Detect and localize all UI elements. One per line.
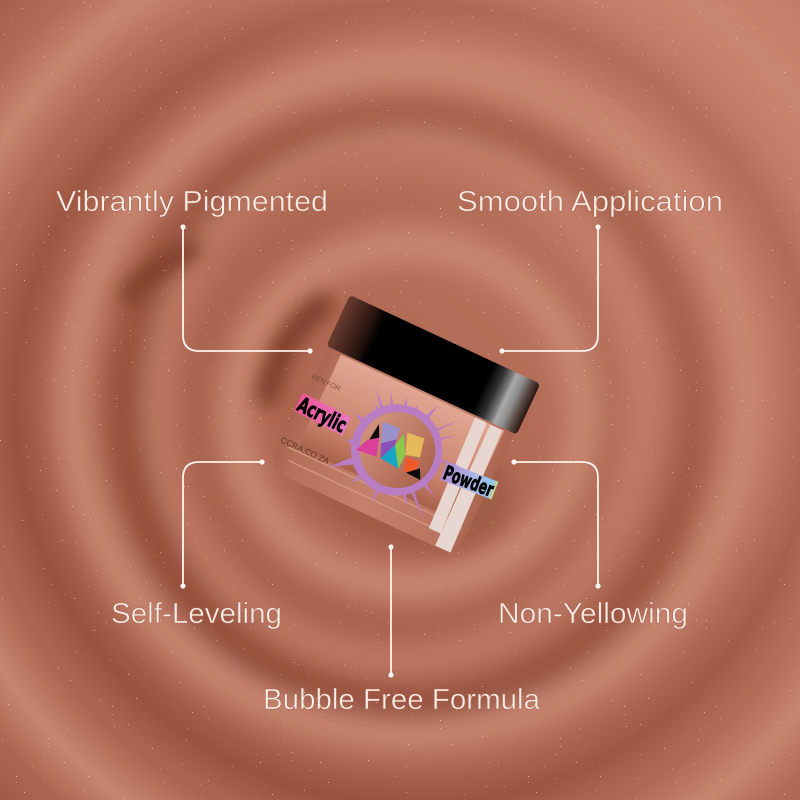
black lid	[326, 295, 540, 435]
callout: Bubble Free Formula: Bubble Free Formula	[263, 684, 541, 716]
product jar	[262, 295, 540, 587]
callout: Self-Leveling	[111, 459, 282, 630]
logo: colourful geometric shapes	[356, 422, 424, 480]
light rings	[72, 65, 748, 735]
callout: Non-Yellowing: Non-Yellowing	[498, 598, 688, 630]
small jar upper text: BEN FOR	[310, 373, 341, 393]
glass body	[268, 342, 516, 556]
small jar website text: CCRA.CO.ZA	[279, 435, 331, 466]
callout: Bubble Free Formula	[263, 544, 541, 716]
white label stripes	[419, 417, 507, 553]
powder fill	[298, 355, 504, 523]
callout: Self-Leveling: Self-Leveling	[111, 598, 282, 630]
Acrylic label band: Acrylic	[293, 393, 351, 438]
jar shadow	[262, 353, 538, 587]
Powder label band	[439, 460, 499, 502]
dark rings	[125, 115, 695, 705]
jar body and lid	[268, 295, 540, 558]
Acrylic label band	[293, 392, 352, 438]
callout: Smooth Application: Smooth Application	[457, 186, 723, 218]
callout: Non-Yellowing	[498, 459, 688, 630]
callout: Vibrantly Pigmented: Vibrantly Pigmented	[56, 186, 328, 218]
callout: Smooth Application	[457, 186, 723, 354]
Powder label band: Powder	[440, 460, 497, 502]
purple splash logo ring	[327, 388, 460, 521]
deep shadow crescents behind jar	[130, 250, 322, 395]
glass base	[283, 447, 462, 539]
callout: Vibrantly Pigmented	[56, 186, 328, 354]
